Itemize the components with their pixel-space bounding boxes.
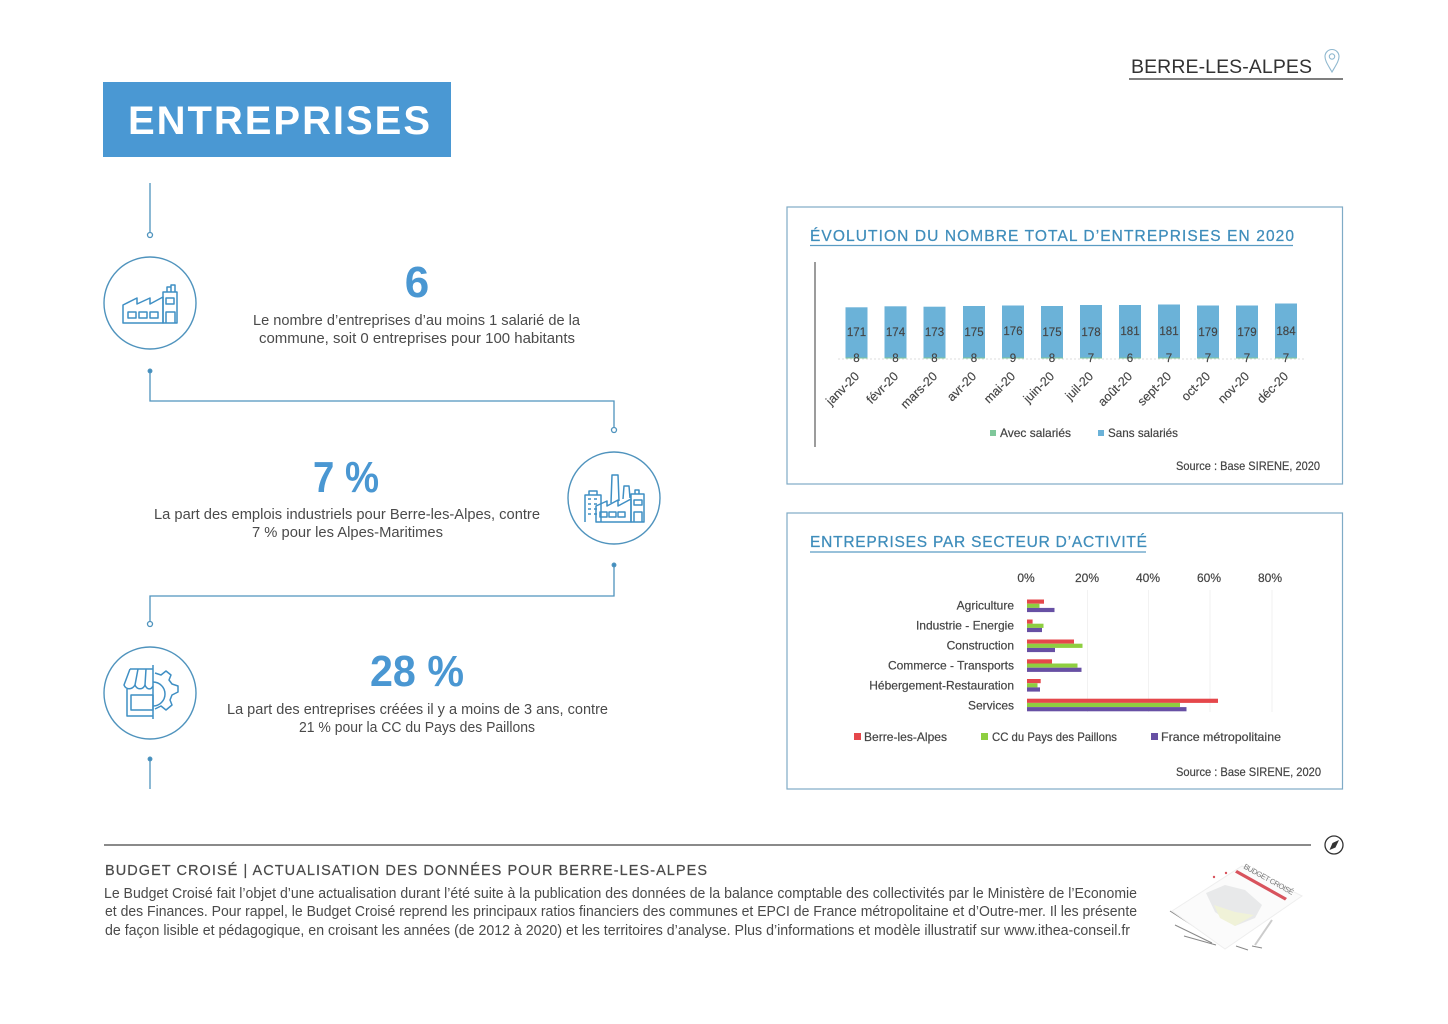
- chart legend: CC du Pays des Paillons: [992, 730, 1117, 744]
- connector lines: [148, 183, 616, 789]
- panel: businesses by sector: [787, 513, 1342, 789]
- horizontal bar chart: 40%: [1136, 571, 1160, 585]
- stat: 6: 6: [405, 258, 429, 307]
- chart legend: Sans salariés: [1108, 426, 1178, 440]
- horizontal bar chart: Industrie - Energie: [916, 618, 1014, 632]
- stacked bar chart: nov-20: [1215, 369, 1252, 406]
- stacked bar chart: déc-20: [1254, 369, 1291, 406]
- stacked bar chart: 8: [971, 353, 977, 365]
- stat: 7 %: 7 % pour les Alpes-Maritimes: [252, 524, 443, 541]
- horizontal bar chart: 0%: [1017, 571, 1035, 585]
- stacked bar chart: 6: [1127, 353, 1133, 365]
- stat: 7 %: La part des emplois industriels pour Berre-les-Alpes, contre: [154, 506, 540, 523]
- stat: 6: [253, 258, 581, 347]
- stat: 28 %: 21 % pour la CC du Pays des Paillons: [299, 719, 535, 736]
- panel title: ENTREPRISES PAR SECTEUR D’ACTIVITÉ: [810, 534, 1147, 551]
- stacked bar chart: 178: [1081, 327, 1101, 339]
- stacked bar chart: 7: [1244, 353, 1250, 365]
- horizontal bar chart: Commerce - Transports: [888, 658, 1014, 672]
- stacked bar chart: 175: [964, 327, 984, 339]
- stacked bar chart: 171: [847, 327, 866, 339]
- stat: 6: commune, soit 0 entreprises pour 100 habitants: [259, 330, 575, 347]
- source note: Source : Base SIRENE, 2020: [1176, 459, 1320, 473]
- stacked bar chart: mars-20: [898, 369, 940, 412]
- stat: 28 %: [227, 647, 608, 736]
- chart legend: Avec salariés: [1000, 426, 1071, 440]
- title banner: [103, 82, 451, 157]
- chart legend: [854, 730, 1281, 744]
- brochure illustration: BUDGET CROISÉ: [1242, 862, 1295, 897]
- footer: [104, 836, 1343, 950]
- title banner: ENTREPRISES: [128, 99, 430, 143]
- stacked bar chart: 8: [1049, 353, 1055, 365]
- icon: factory: [104, 257, 196, 349]
- stacked bar chart: sept-20: [1135, 369, 1174, 409]
- stacked bar chart: 184: [1276, 326, 1296, 338]
- horizontal bar chart: Agriculture: [957, 598, 1014, 612]
- stacked bar chart: 9: [1010, 353, 1016, 365]
- stacked bar chart: 173: [925, 327, 944, 339]
- location header: [1129, 50, 1343, 79]
- stat: 7 %: 7 %: [313, 453, 379, 502]
- stacked bar chart: 7: [1205, 353, 1211, 365]
- location header: BERRE-LES-ALPES: [1131, 56, 1312, 78]
- stacked bar chart: 179: [1237, 327, 1257, 339]
- stat: 6: Le nombre d’entreprises d’au moins 1 salarié de la: [253, 312, 581, 329]
- chart legend: Berre-les-Alpes: [864, 730, 947, 744]
- footer heading: BUDGET CROISÉ | ACTUALISATION DES DONNÉES POUR BERRE-LES-ALPES: [105, 862, 707, 879]
- chart legend: [990, 426, 1178, 440]
- stacked bar chart: 176: [1003, 326, 1023, 338]
- panel: evolution of businesses: [787, 207, 1342, 484]
- stacked bar chart: [815, 262, 1305, 447]
- stacked bar chart: 174: [886, 327, 906, 339]
- stacked bar chart: janv-20: [823, 369, 862, 409]
- stacked bar chart: févr-20: [864, 369, 901, 407]
- stacked bar chart: juil-20: [1062, 369, 1096, 403]
- stacked bar chart: 8: [892, 353, 899, 365]
- chart legend: France métropolitaine: [1161, 730, 1281, 744]
- stacked bar chart: juin-20: [1020, 369, 1057, 406]
- stacked bar chart: 175: [1042, 327, 1062, 339]
- stacked bar chart: 7: [1166, 353, 1172, 365]
- stacked bar chart: 181: [1120, 326, 1140, 338]
- stacked bar chart: 7: [1088, 353, 1094, 365]
- horizontal bar chart: 60%: [1197, 571, 1221, 585]
- stacked bar chart: mai-20: [981, 369, 1018, 406]
- brochure illustration: [1170, 862, 1302, 950]
- footer text: [104, 885, 1137, 939]
- stacked bar chart: avr-20: [944, 369, 979, 404]
- source note: Source : Base SIRENE, 2020: [1176, 765, 1321, 779]
- stat: 28 %: 28 %: [370, 647, 464, 696]
- stacked bar chart: 181: [1159, 326, 1179, 338]
- stacked bar chart: 7: [1283, 353, 1289, 365]
- footer text: de façon lisible et pédagogique, en croisant les années (de 2012 à 2020) et les territoires d’analyse. Plus d’informations et modèle illustratif sur www.ithea-conseil.fr: [105, 922, 1130, 939]
- horizontal bar chart: 20%: [1075, 571, 1099, 585]
- icon: map pin: [1325, 50, 1339, 72]
- horizontal bar chart: Services: [968, 698, 1014, 712]
- icon: compass: [1325, 836, 1343, 854]
- stat: 28 %: La part des entreprises créées il y a moins de 3 ans, contre: [227, 701, 608, 718]
- footer text: et des Finances. Pour rappel, le Budget Croisé reprend les principaux ratios financiers des communes et EPCI de France métropolitaine et d’Outre-mer. Il les présente: [105, 903, 1137, 920]
- horizontal bar chart: 80%: [1258, 571, 1282, 585]
- horizontal bar chart: Hébergement-Restauration: [869, 678, 1014, 692]
- icon: industrial complex: [568, 452, 660, 544]
- stacked bar chart: août-20: [1095, 369, 1135, 409]
- stacked bar chart: 8: [853, 353, 860, 365]
- stacked bar chart: oct-20: [1179, 369, 1213, 404]
- stacked bar chart: 8: [931, 353, 938, 365]
- icon: shop and gear: [104, 647, 196, 739]
- panel title: ÉVOLUTION DU NOMBRE TOTAL D’ENTREPRISES EN 2020: [810, 228, 1294, 245]
- stacked bar chart: 179: [1198, 327, 1218, 339]
- stat: 7 %: [154, 453, 540, 541]
- horizontal bar chart: [869, 571, 1282, 712]
- horizontal bar chart: Construction: [947, 638, 1014, 652]
- footer text: Le Budget Croisé fait l’objet d’une actualisation durant l’été suite à la publication des données de la balance comptable des collectivités par le Ministère de l’Economie: [104, 885, 1137, 902]
